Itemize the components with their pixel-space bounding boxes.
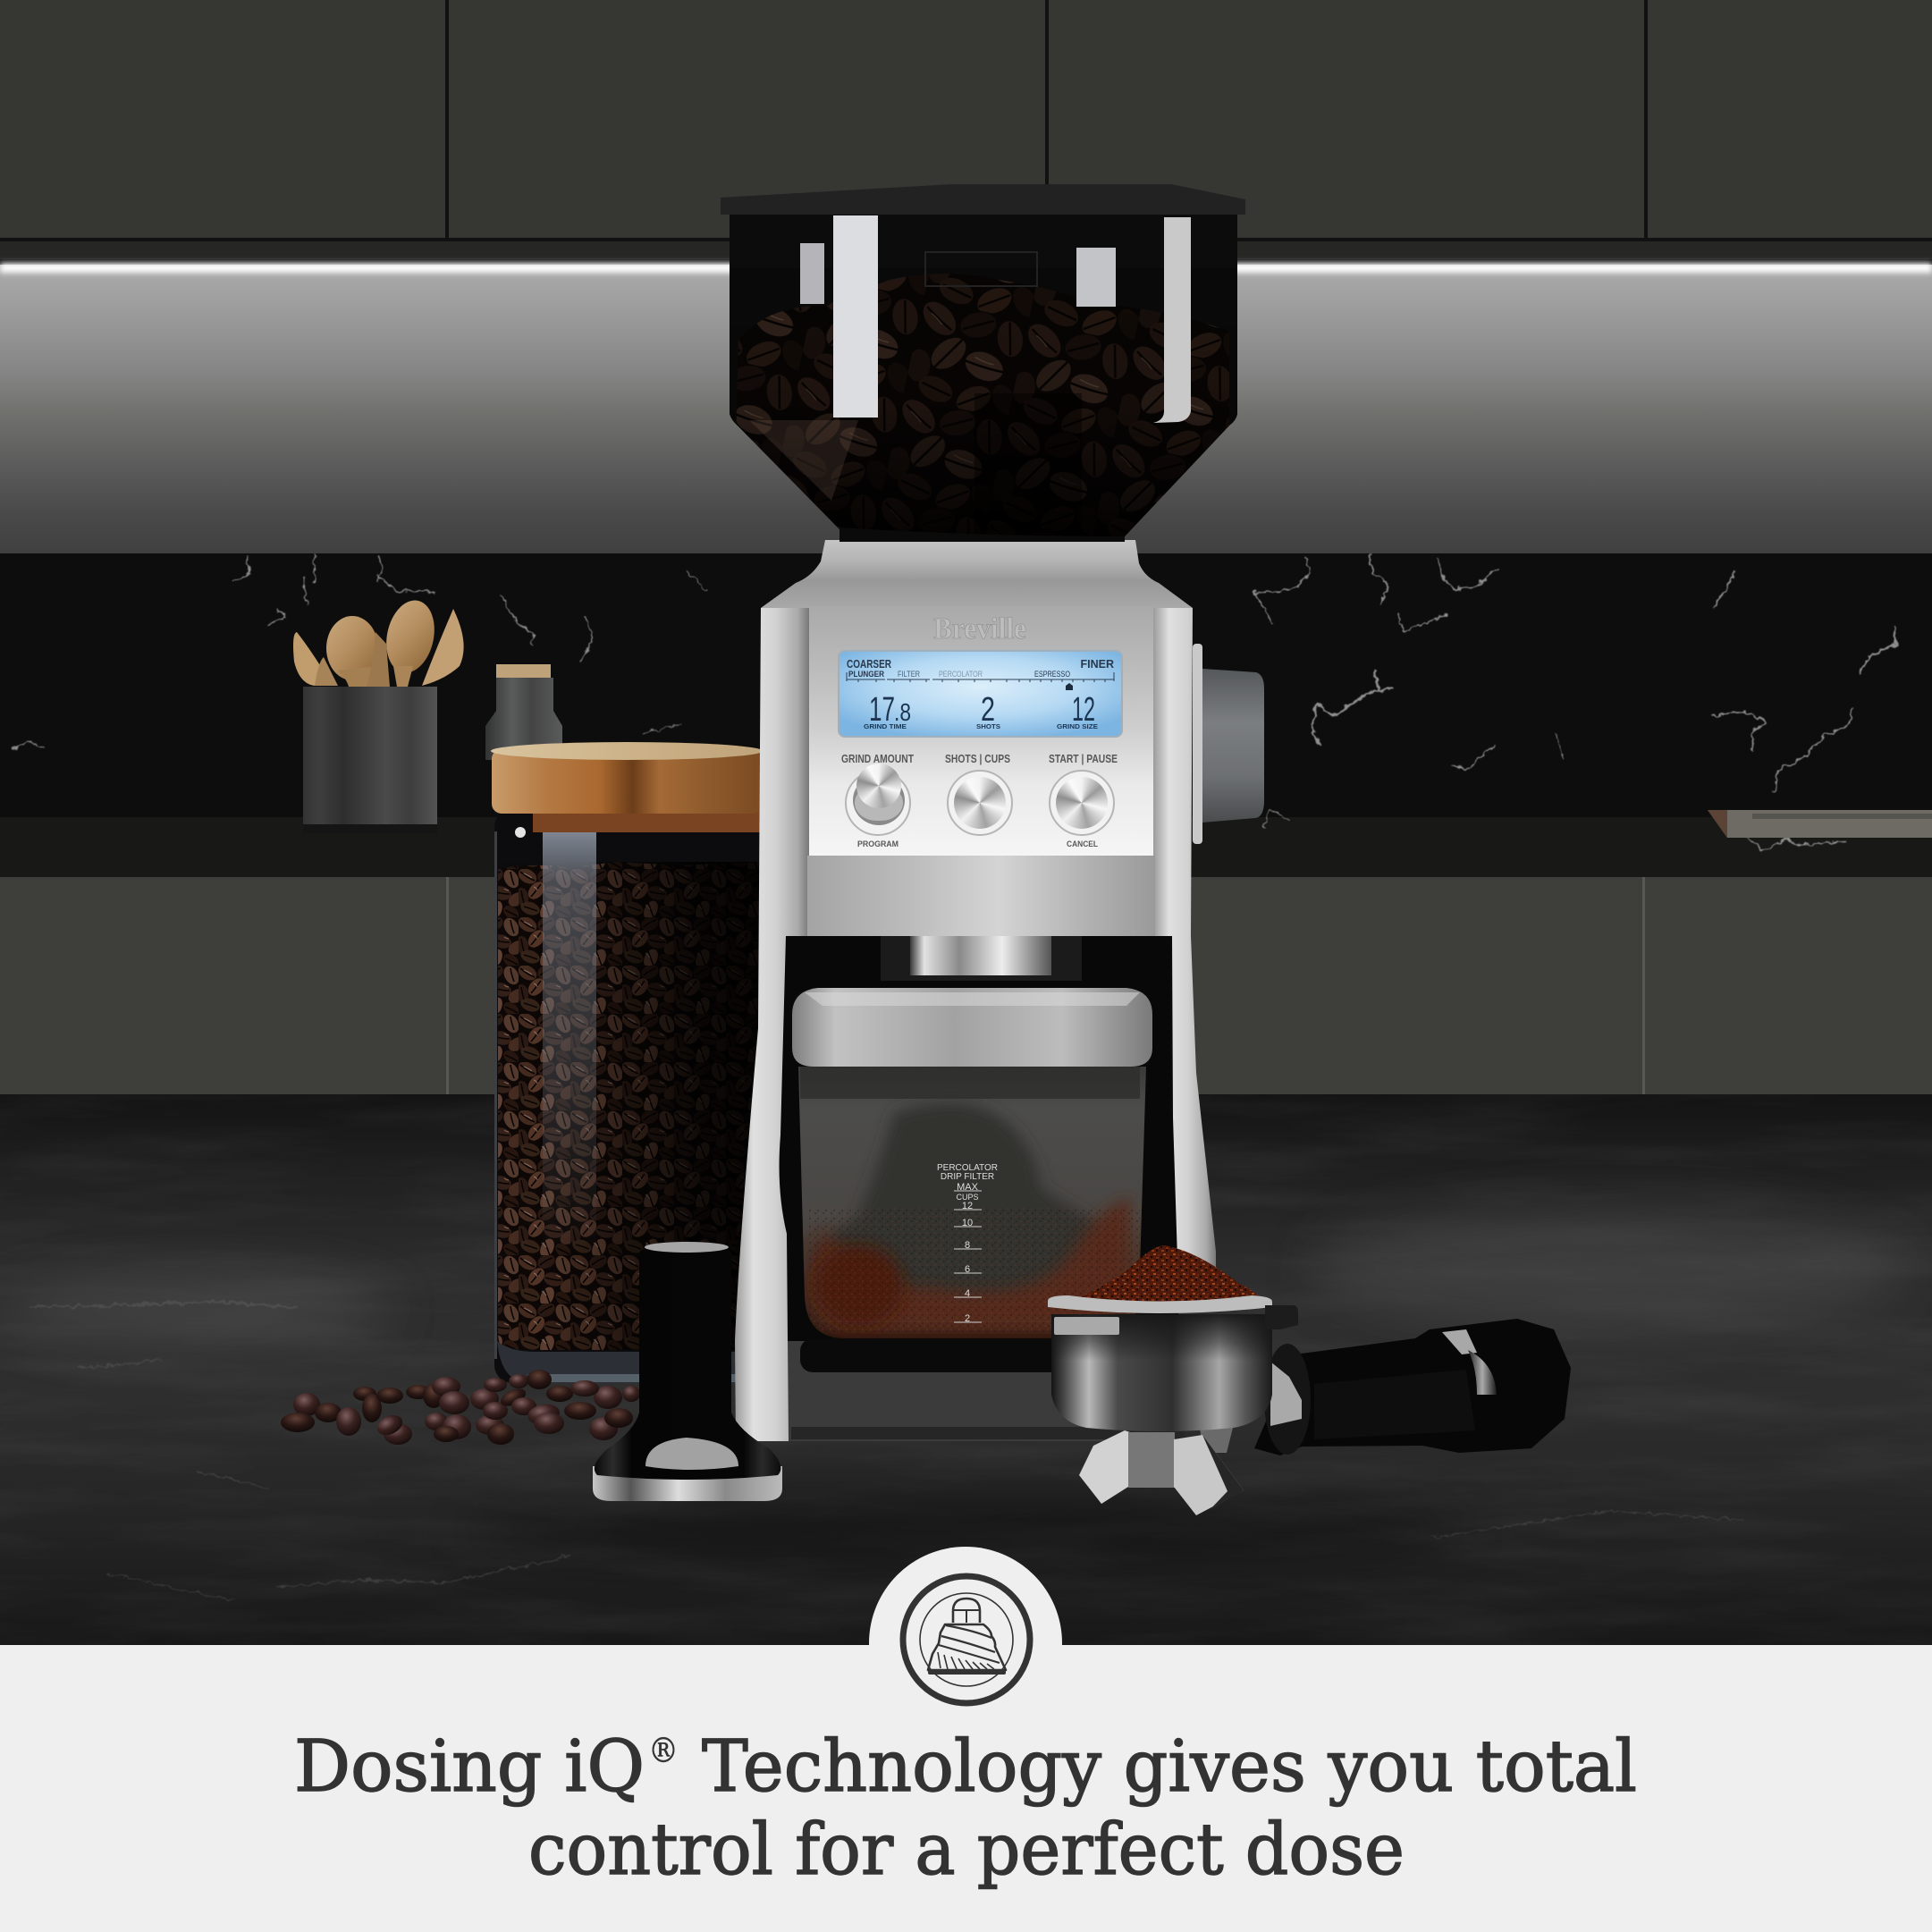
lcd readouts: 12 — [1072, 691, 1095, 729]
handle lower face — [1314, 1370, 1475, 1439]
lug right — [1265, 1305, 1298, 1329]
upper cabinets — [0, 0, 1932, 241]
lcd readouts — [864, 691, 1098, 730]
caption heading — [294, 1725, 1637, 1891]
jar left edge — [494, 831, 497, 1359]
lcd display — [839, 651, 1122, 737]
measurement markings: 2 — [965, 1313, 970, 1324]
floor shadow under appliance — [465, 1497, 1466, 1561]
caption heading: control for a perfect dose — [528, 1808, 1405, 1891]
button labels: PROGRAM — [857, 839, 899, 848]
cabinet underside shadow — [0, 241, 1932, 259]
coffee tamper — [593, 1242, 782, 1501]
back prong — [1200, 1428, 1233, 1453]
floor faint veins — [31, 1302, 1743, 1600]
neck collar — [1264, 1344, 1311, 1455]
icon: grinder burr — [903, 1576, 1030, 1703]
jar base — [497, 1341, 763, 1383]
glass storage jar with beans — [491, 742, 763, 1383]
brand logo: Breville — [933, 612, 1026, 645]
basket rim — [1048, 1295, 1272, 1313]
floor haze left — [0, 1274, 393, 1346]
front panel lower — [807, 856, 1155, 936]
darker grounds patch — [814, 1244, 903, 1327]
marble veins — [13, 554, 1896, 850]
spout right dark edge — [1202, 1435, 1244, 1511]
basket top shade — [1051, 1314, 1272, 1361]
cone glass glare — [749, 420, 858, 501]
measurement markings: 8 — [965, 1240, 970, 1251]
spout center — [1128, 1432, 1175, 1488]
shots cups button — [948, 771, 1012, 835]
jar glare column — [543, 831, 596, 1252]
caption heading: Dosing iQ — [294, 1725, 645, 1808]
chute — [881, 936, 1082, 981]
bottom caption band — [0, 1547, 1932, 1932]
left leg — [735, 608, 809, 1441]
jar specular dot — [515, 827, 526, 838]
lcd readouts: GRIND SIZE — [1057, 722, 1098, 730]
grind size dial — [1202, 669, 1264, 823]
lcd readouts: 17 — [869, 691, 895, 729]
lcd readouts: SHOTS — [976, 722, 1000, 730]
dose container glass — [798, 1067, 1146, 1338]
lug left — [1054, 1317, 1119, 1335]
pot base — [303, 824, 437, 833]
button labels: START | PAUSE — [1049, 753, 1118, 765]
base — [778, 1338, 1185, 1441]
handle — [1254, 1319, 1571, 1455]
hopper window left — [800, 243, 824, 304]
jar base shine — [527, 1374, 763, 1382]
pot — [303, 687, 437, 826]
handle top band highlight — [1442, 1329, 1477, 1354]
measurement markings — [937, 1163, 998, 1324]
countertop shelf — [0, 817, 1932, 877]
lcd scale text: PERCOLATOR — [939, 670, 983, 679]
caption heading: Technology gives you total — [702, 1725, 1637, 1808]
measurement markings: PERCOLATOR — [937, 1163, 998, 1173]
hopper reflection strip right — [1153, 217, 1191, 423]
band background — [0, 1645, 1932, 1932]
measurement markings: DRIP FILTER — [941, 1172, 994, 1182]
lcd readouts: 2 — [981, 691, 995, 729]
measurement markings: 12 — [962, 1201, 973, 1211]
coffee mound — [1067, 1245, 1267, 1303]
lcd scale text: ESPRESSO — [1034, 670, 1070, 679]
portafilter — [1048, 1245, 1571, 1515]
marble backsplash — [0, 553, 1932, 818]
start pause button — [1050, 771, 1114, 835]
hopper lid — [721, 184, 1245, 215]
metal tray on the right counter — [1708, 810, 1932, 838]
container contents — [800, 1067, 1140, 1332]
wall glow — [0, 265, 1932, 553]
spout right prong — [1174, 1435, 1244, 1515]
caption heading: ® — [648, 1731, 679, 1770]
tamper shine — [645, 1438, 738, 1470]
jar bean shading — [498, 862, 763, 1350]
hopper inner frame — [925, 252, 1037, 286]
bottle — [485, 664, 562, 760]
neck silver — [1270, 1362, 1302, 1426]
jar glass — [494, 809, 763, 1383]
floor haze right — [1314, 1207, 1904, 1332]
lcd scale text: FILTER — [898, 670, 920, 679]
coffee grain — [809, 1207, 1140, 1332]
dose container lid — [792, 988, 1152, 1067]
bean hopper — [730, 215, 1237, 545]
button labels: CANCEL — [1067, 839, 1098, 848]
measurement markings: 6 — [965, 1264, 970, 1275]
ground coffee layer — [809, 1198, 1131, 1332]
hopper beans — [730, 268, 1237, 545]
side block — [1193, 644, 1202, 844]
measurement markings: 10 — [962, 1218, 973, 1228]
coffee grinder — [721, 184, 1264, 1441]
basket body — [1051, 1314, 1272, 1431]
led strip light — [0, 263, 1932, 273]
jar beans — [498, 862, 763, 1350]
stone floor — [0, 1094, 1932, 1649]
button labels: GRIND AMOUNT — [841, 753, 914, 765]
scattered coffee beans — [281, 1370, 640, 1445]
tamper body — [595, 1244, 780, 1480]
wooden lid — [491, 742, 763, 832]
button labels: SHOTS | CUPS — [945, 753, 1010, 765]
lcd scale text: FINER — [1080, 658, 1114, 671]
measurement markings: CUPS — [956, 1193, 979, 1202]
button labels — [841, 753, 1118, 848]
tamper base ring — [593, 1466, 782, 1501]
measurement markings: 4 — [965, 1288, 970, 1299]
tamper top cap — [645, 1242, 729, 1253]
collar shoulder — [761, 540, 1193, 608]
lower cabinets — [0, 877, 1932, 1094]
hopper rim band — [839, 527, 1125, 542]
spout left prong — [1079, 1430, 1130, 1504]
handle curved shine — [1468, 1350, 1497, 1395]
grind amount knob — [846, 764, 910, 835]
hopper window right — [1076, 248, 1116, 307]
wooden spoons — [293, 595, 464, 687]
opening interior — [776, 930, 1178, 1439]
grounds mound — [830, 1100, 1093, 1291]
right leg — [1153, 608, 1216, 1287]
lcd scale line — [847, 672, 1114, 682]
hopper reflection strip left — [833, 215, 878, 418]
glass top band — [800, 1067, 1140, 1099]
lcd pointer — [1066, 683, 1073, 690]
utensil pot with wooden spoons — [293, 595, 562, 833]
lcd scale text — [847, 658, 1114, 679]
band bump — [869, 1547, 1062, 1740]
lcd scale text: COARSER — [847, 658, 891, 671]
front panel upper — [809, 606, 1153, 856]
lcd readouts: GRIND TIME — [864, 722, 907, 730]
lcd readouts: .8 — [894, 698, 911, 726]
lcd scale text: PLUNGER — [848, 670, 884, 679]
measurement markings: MAX — [957, 1182, 979, 1193]
